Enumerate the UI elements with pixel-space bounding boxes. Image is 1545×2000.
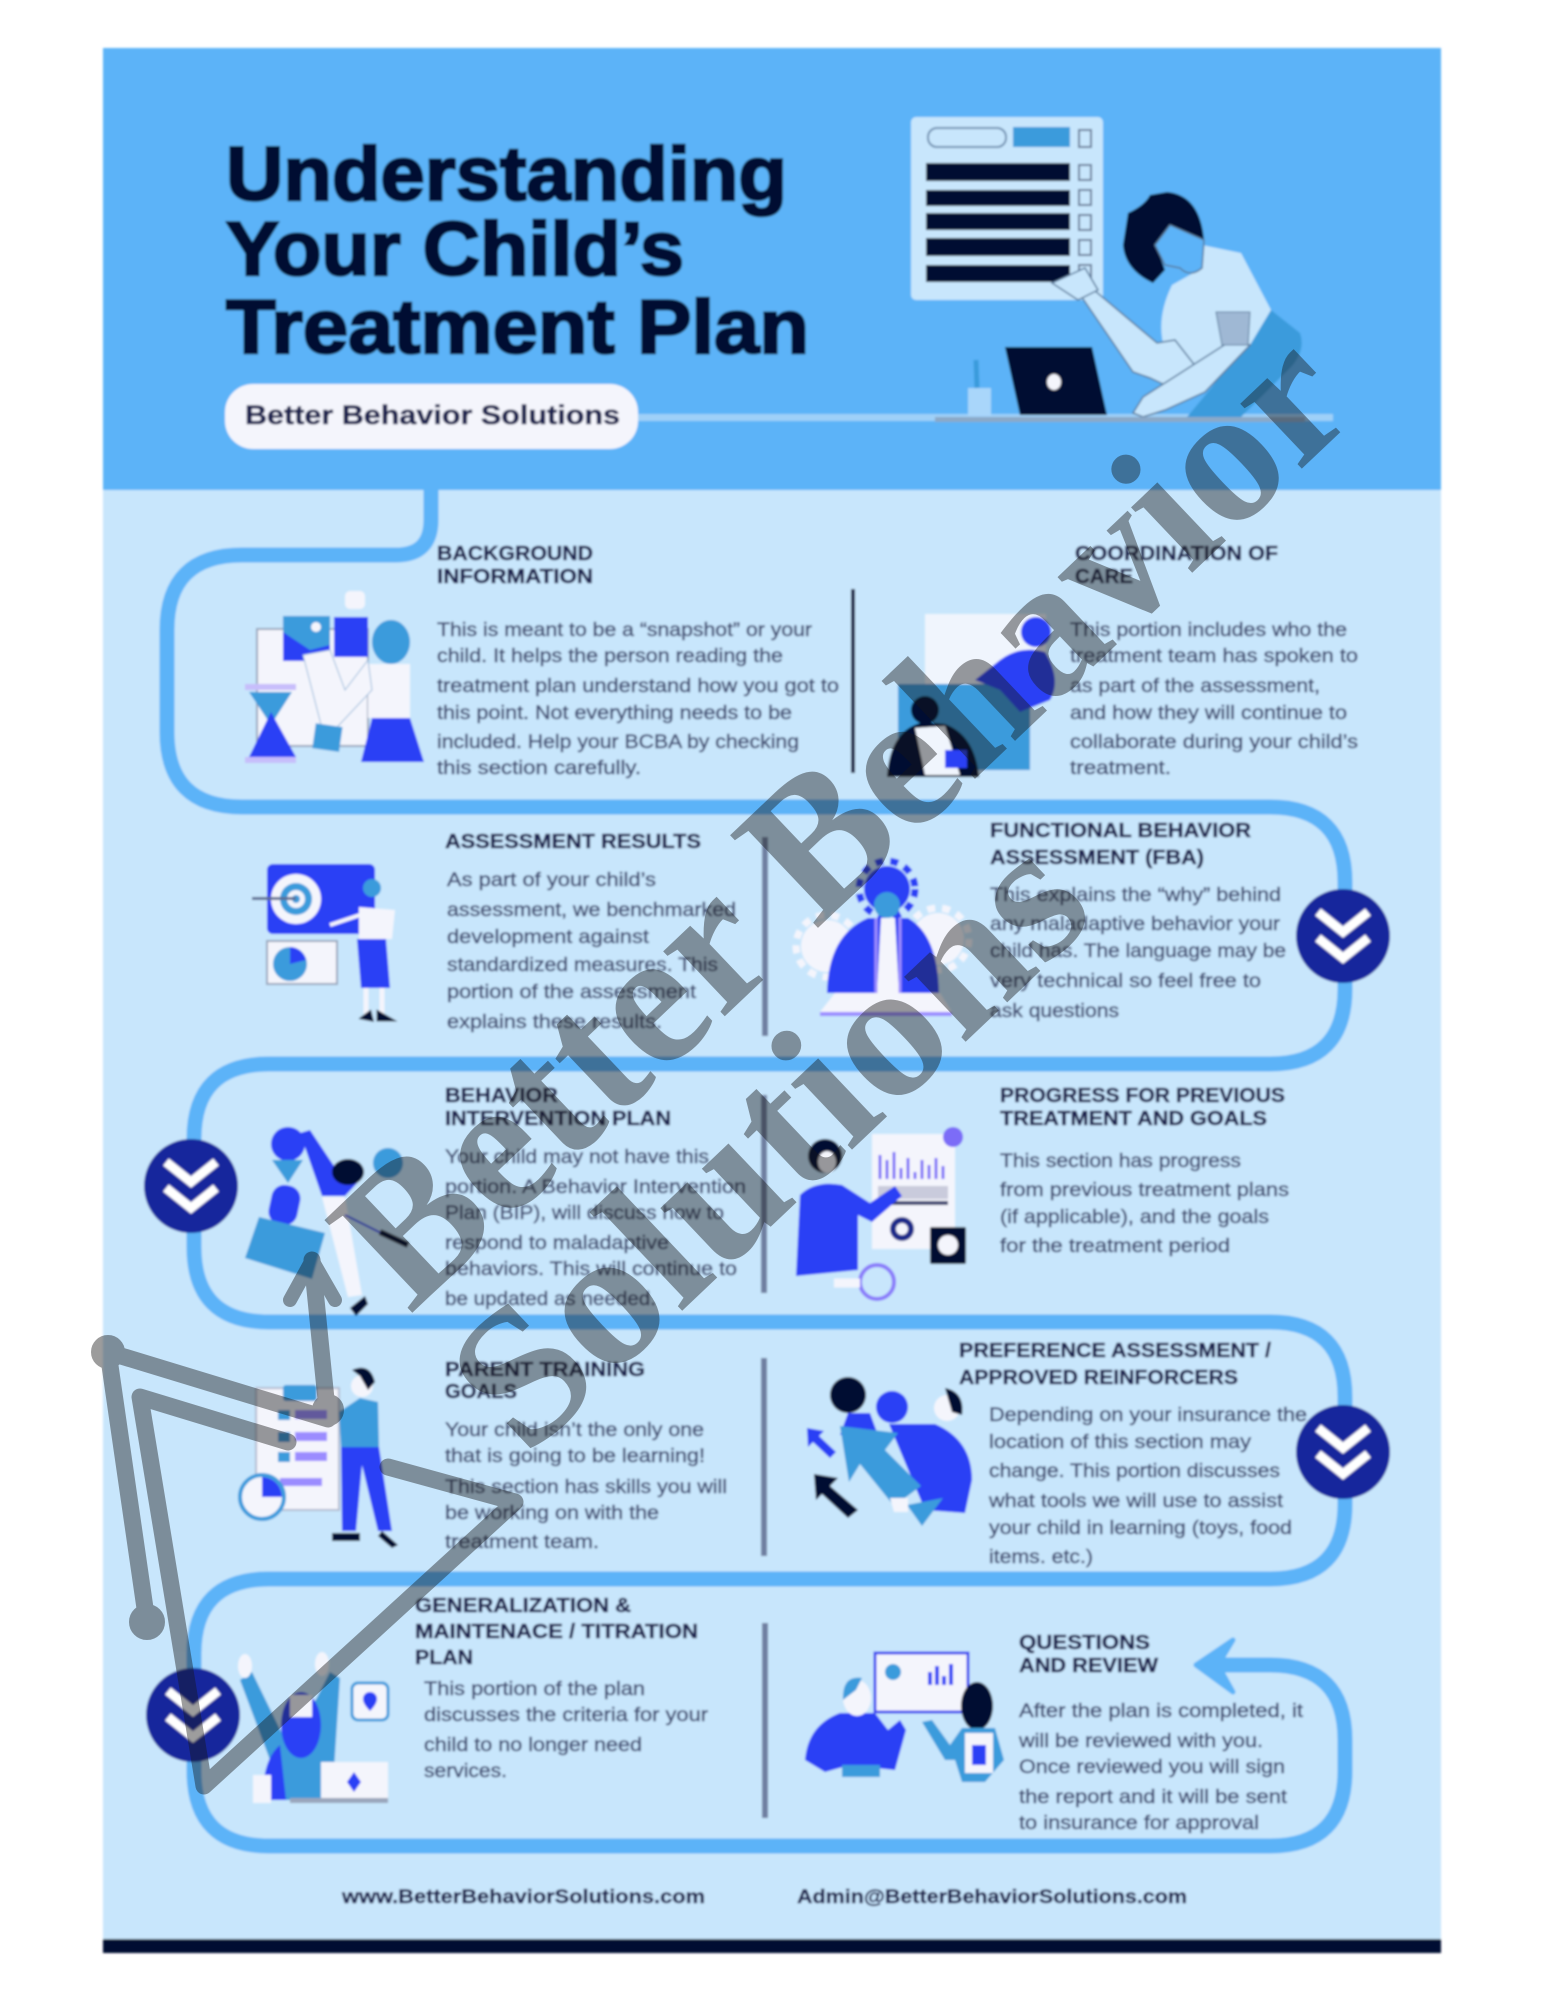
footer email: Admin@BetterBehaviorSolutions.com — [797, 1887, 1187, 1908]
heading: FUNCTIONAL BEHAVIOR — [990, 820, 1252, 842]
footer website: www.BetterBehaviorSolutions.com — [341, 1887, 705, 1908]
body text: treatment. — [1070, 758, 1171, 779]
bottom band — [103, 1939, 1441, 1953]
heading: PROGRESS FOR PREVIOUS — [1000, 1085, 1285, 1107]
body text: This portion of the plan — [424, 1679, 645, 1700]
heading — [445, 1085, 671, 1130]
title: Your Child’s — [226, 207, 684, 292]
body text — [990, 885, 1286, 1022]
body text — [445, 1420, 727, 1553]
body text — [447, 870, 736, 1033]
company name pill: Better Behavior Solutions — [245, 400, 620, 430]
arrowhead at end of path — [1196, 1640, 1233, 1692]
heading: PARENT TRAINING — [445, 1359, 645, 1381]
body text: standardized measures. This — [447, 955, 718, 976]
body text: This is meant to be a “snapshot” or your — [437, 620, 813, 641]
heading: INFORMATION — [437, 566, 593, 588]
body text: Depending on your insurance the — [989, 1405, 1307, 1426]
body text: that is going to be learning! — [445, 1446, 705, 1467]
section: background information — [245, 543, 839, 779]
header panel — [103, 48, 1441, 490]
title: Understanding — [226, 132, 787, 217]
heading: GENERALIZATION & — [415, 1595, 631, 1617]
section: questions and review — [805, 1632, 1304, 1834]
body text: be updated as needed. — [445, 1289, 656, 1310]
heading: COORDINATION OF — [1075, 543, 1278, 565]
heading: PLAN — [415, 1647, 473, 1669]
body text: your child in learning (toys, food — [989, 1518, 1292, 1539]
section: preference assessment — [807, 1340, 1307, 1568]
heading: ASSESSMENT RESULTS — [445, 831, 701, 853]
icon: man with raised arms — [238, 1652, 388, 1803]
icon: arrows and man — [807, 1377, 972, 1526]
heading — [437, 543, 593, 588]
desk line — [630, 414, 1333, 421]
icon: hourglass and woman at board — [245, 591, 424, 763]
heading: QUESTIONS — [1019, 1632, 1150, 1654]
body text: ask questions — [990, 1001, 1119, 1022]
body text: respond to maladaptive — [445, 1233, 669, 1254]
body text: development against — [447, 927, 650, 948]
section: progress for previous treatment — [796, 1085, 1289, 1299]
heading: BEHAVIOR — [445, 1085, 559, 1107]
heading — [990, 820, 1252, 869]
heading: AND REVIEW — [1019, 1655, 1158, 1677]
heading: GOALS — [445, 1381, 517, 1403]
company name pill — [225, 384, 638, 449]
body text: Once reviewed you will sign — [1019, 1757, 1285, 1778]
body text: This section has progress — [1000, 1151, 1241, 1172]
title — [226, 132, 809, 370]
icon: man presenting chart — [796, 1127, 966, 1299]
body text: This explains the “why” behind — [990, 885, 1281, 906]
body text: any maladaptive behavior your — [990, 914, 1281, 935]
heading — [445, 1359, 645, 1403]
section: functional behavior assessment — [796, 820, 1286, 1022]
body text: child has. The language may be — [990, 941, 1286, 962]
body text: (if applicable), and the goals — [1000, 1207, 1269, 1228]
body text: services. — [424, 1761, 507, 1782]
heading — [959, 1340, 1271, 1389]
body text: this section carefully. — [437, 758, 641, 779]
body text: items. etc.) — [989, 1547, 1093, 1568]
section: assessment results — [252, 831, 736, 1033]
section: behavior intervention plan — [245, 1085, 746, 1316]
body text: collaborate during your child’s — [1070, 732, 1358, 753]
body text: very technical so feel free to — [990, 971, 1261, 992]
body text: this point. Not everything needs to be — [437, 703, 792, 724]
watermark text: Better Behavior — [291, 288, 1390, 1346]
heading: CARE — [1075, 566, 1133, 588]
body text: change. This portion discusses — [989, 1461, 1280, 1482]
body text: and how they will continue to — [1070, 703, 1347, 724]
body text: child. It helps the person reading the — [437, 646, 783, 667]
body text — [437, 620, 839, 779]
chevron badge left 2 — [146, 1668, 240, 1762]
body text: will be reviewed with you. — [1018, 1731, 1263, 1752]
body text: assessment, we benchmarked — [447, 900, 736, 921]
icon: target board and presenter — [252, 864, 395, 1020]
chevron badge right 2 — [1296, 1405, 1390, 1499]
body text: location of this section may — [989, 1432, 1252, 1453]
body text: As part of your child’s — [447, 870, 656, 891]
body text — [1070, 620, 1358, 779]
body text: explains these results. — [447, 1012, 662, 1033]
heading: ASSESSMENT (FBA) — [990, 847, 1204, 869]
body text: discusses the criteria for your — [424, 1705, 709, 1726]
section: parent training goals — [240, 1359, 727, 1553]
body text: portion. A Behavior Intervention — [445, 1177, 746, 1198]
body text: behaviors. This will continue to — [445, 1259, 737, 1280]
body text: child to no longer need — [424, 1735, 642, 1756]
body text — [988, 1405, 1307, 1568]
heading: APPROVED REINFORCERS — [959, 1367, 1238, 1389]
body text — [445, 1147, 746, 1310]
heading: TREATMENT AND GOALS — [1000, 1108, 1267, 1130]
body text: the report and it will be sent — [1019, 1787, 1288, 1808]
body text: Your child isn’t the only one — [445, 1420, 704, 1441]
icon: two people with board — [805, 1653, 1004, 1782]
body text: treatment plan understand how you got to — [437, 676, 839, 697]
watermark text: Solutions — [407, 790, 1129, 1490]
body text: from previous treatment plans — [1000, 1180, 1289, 1201]
body text: treatment team has spoken to — [1070, 646, 1358, 667]
body text: what tools we will use to assist — [988, 1491, 1284, 1512]
body text: Your child may not have this — [445, 1147, 709, 1168]
body text — [1000, 1151, 1289, 1257]
body text: portion of the assessment — [447, 982, 697, 1003]
section: coordination of care — [887, 543, 1358, 779]
body text: This portion includes who the — [1070, 620, 1347, 641]
body text: treatment team. — [445, 1532, 599, 1553]
heading — [1019, 1632, 1158, 1677]
heading — [1000, 1085, 1285, 1130]
body text: included. Help your BCBA by checking — [437, 732, 799, 753]
body text: Plan (BIP), will discuss how to — [445, 1203, 724, 1224]
heading — [415, 1595, 698, 1669]
illustration: woman at laptop with checklist — [911, 117, 1305, 422]
section: generalization and maintenance — [238, 1595, 709, 1803]
body text: be working on with the — [445, 1503, 659, 1524]
icon: woman stacking shapes — [245, 1127, 408, 1316]
icon: two colleagues — [887, 614, 1055, 777]
heading: BACKGROUND — [437, 543, 593, 565]
body text: This section has skills you will — [445, 1477, 727, 1498]
heading: INTERVENTION PLAN — [445, 1108, 671, 1130]
body text: as part of the assessment, — [1070, 676, 1320, 697]
chevron badge right 1 — [1296, 889, 1390, 983]
title: Treatment Plan — [226, 285, 809, 370]
heading: PREFERENCE ASSESSMENT / — [959, 1340, 1271, 1362]
heading: MAINTENACE / TITRATION — [415, 1621, 698, 1643]
body text: for the treatment period — [1000, 1236, 1230, 1257]
watermark logo — [99, 1260, 515, 1786]
chevron badge left 1 — [144, 1139, 238, 1233]
serpentine path — [167, 490, 1345, 1846]
body text — [424, 1679, 709, 1782]
icon: man with clipboard — [240, 1368, 398, 1548]
icon: man with gears — [796, 861, 969, 1016]
body text — [1018, 1701, 1304, 1834]
body text: After the plan is completed, it — [1019, 1701, 1304, 1722]
heading — [1075, 543, 1278, 588]
body text: to insurance for approval — [1019, 1813, 1259, 1834]
